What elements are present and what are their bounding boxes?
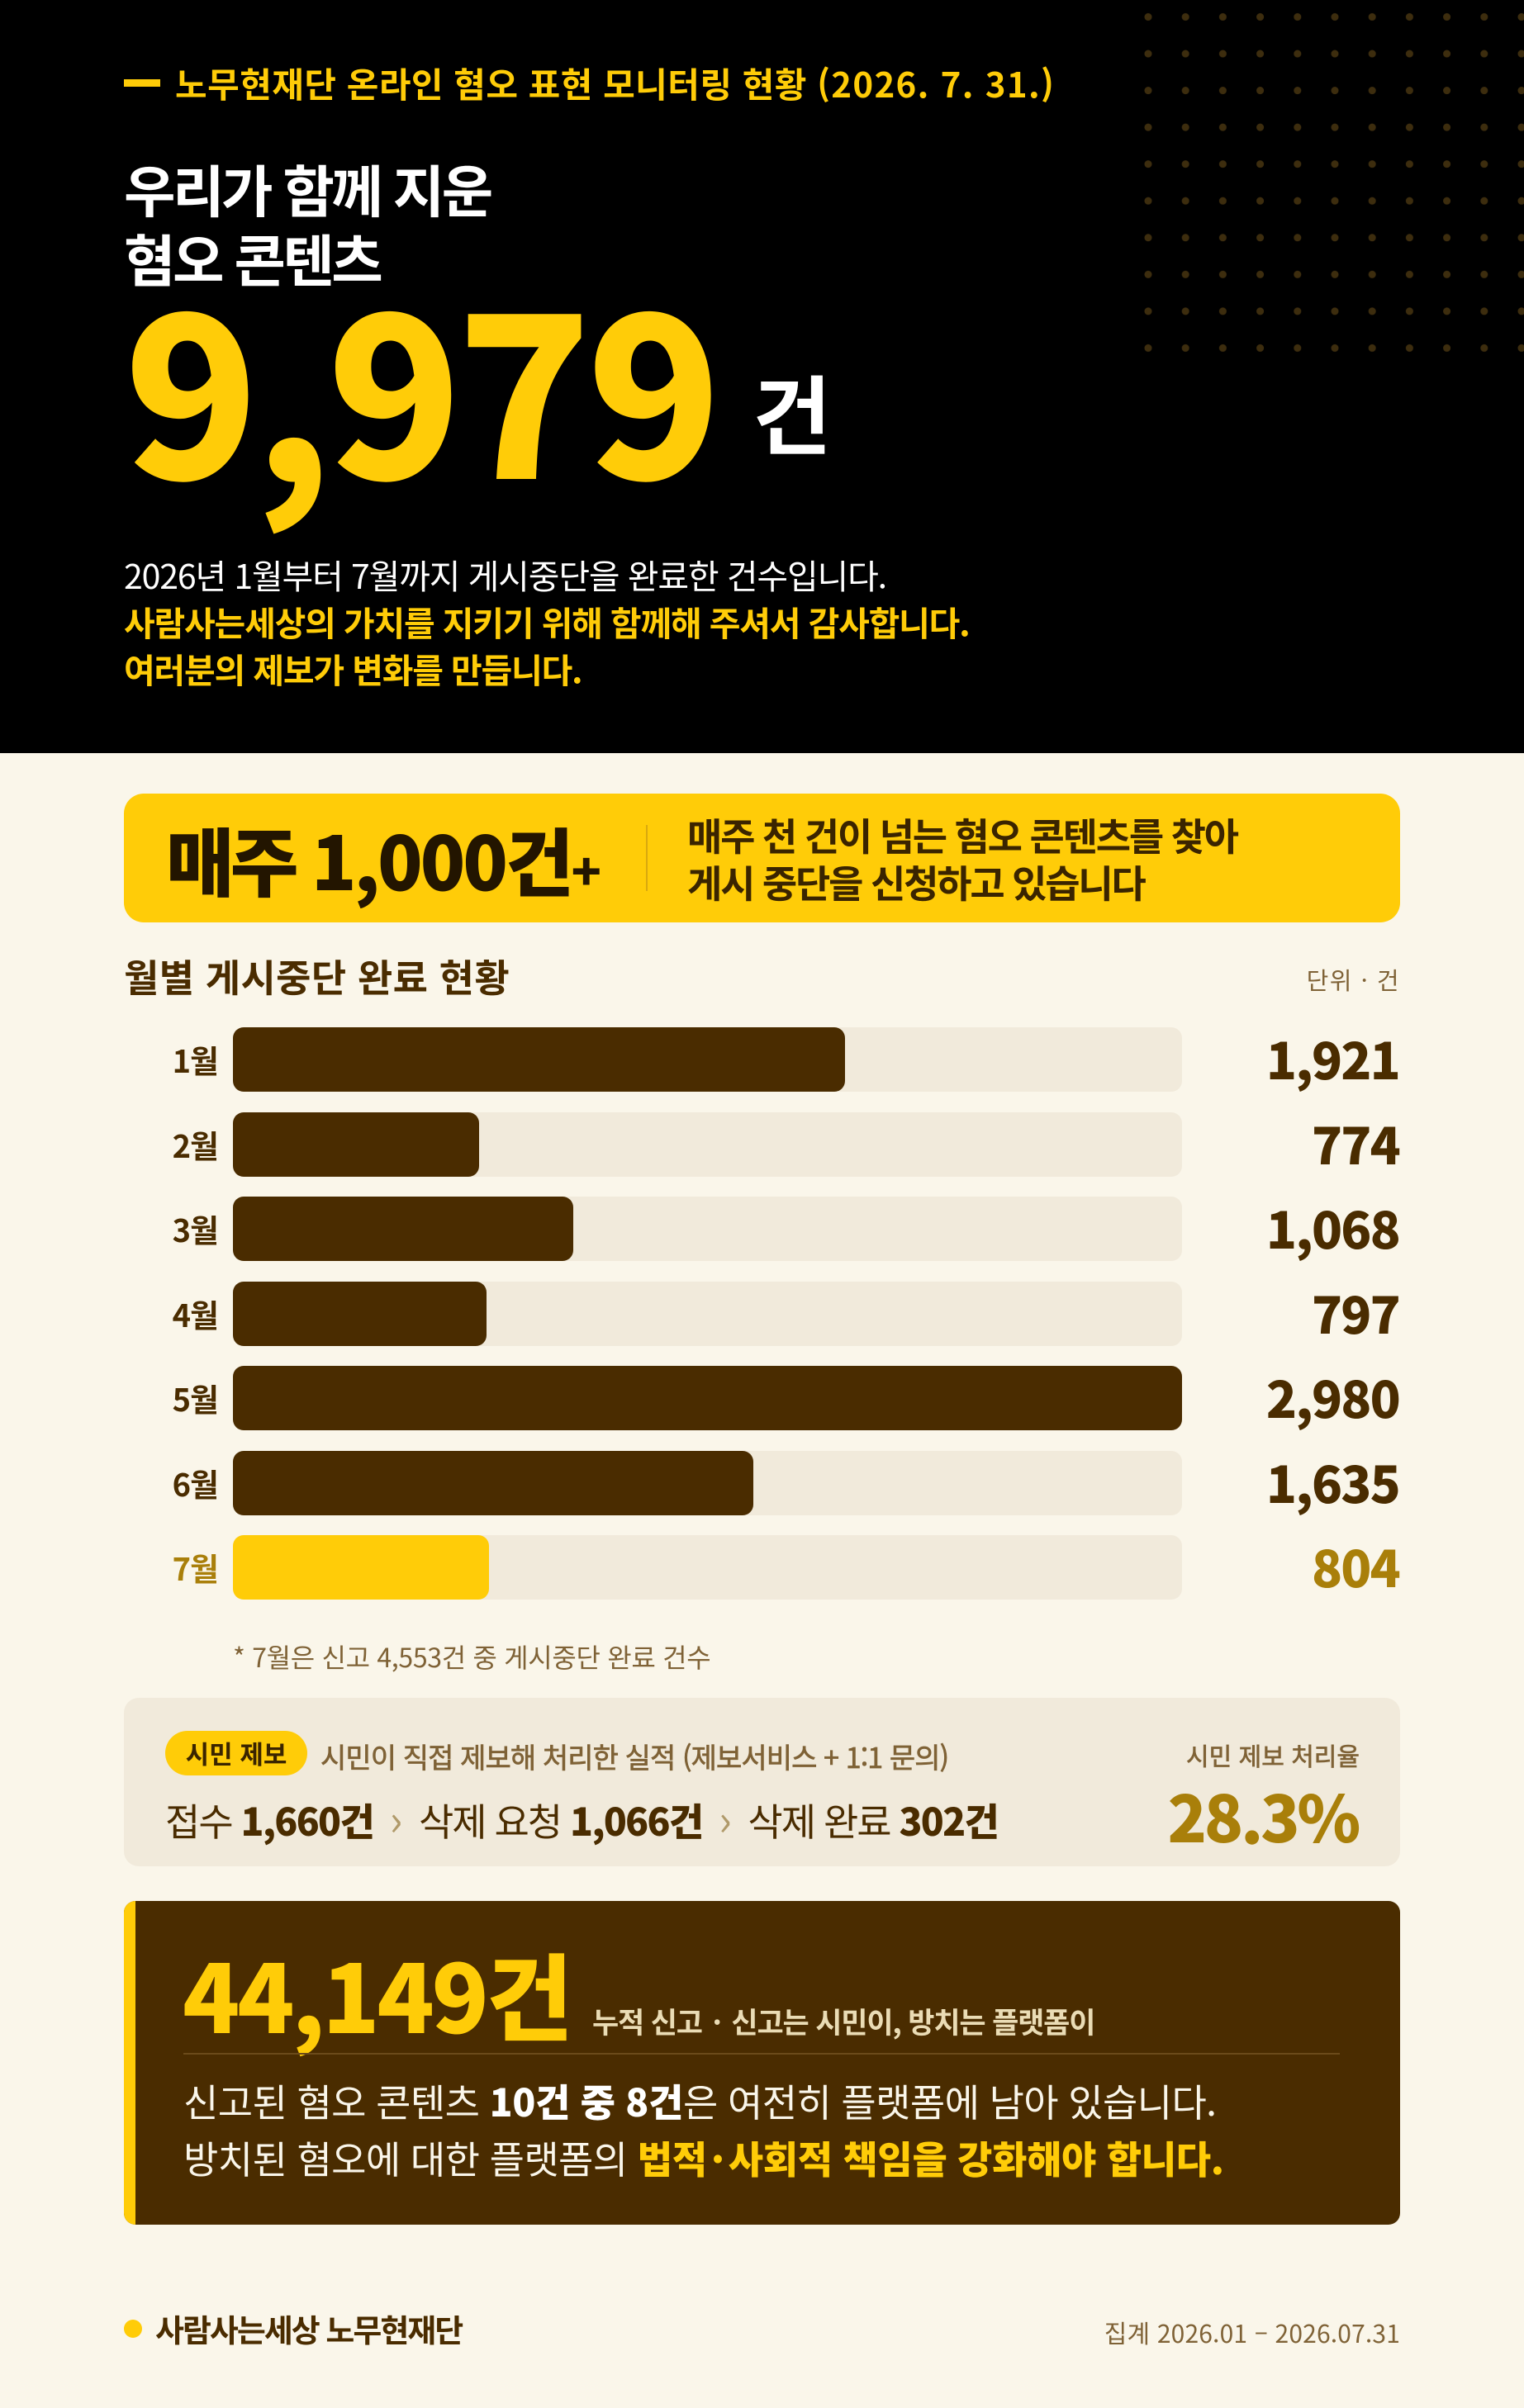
row: March: 1,068: [1266, 1189, 1399, 1263]
reporting flow: 접수 1,660건 삭제 요청 1,066건 삭제 완료 302건: [165, 1793, 998, 1847]
organization name: 사람사는세상 노무현재단: [155, 2306, 462, 2351]
row: April: [173, 1275, 1399, 1348]
banner description: [687, 808, 1239, 908]
chart footnote: * 7월은 신고 4,553건 중 게시중단 완료 건수: [233, 1638, 710, 1676]
panel: header: [0, 0, 1524, 753]
chart unit: 단위 · 건: [1307, 962, 1400, 997]
icon: yellow dash: [124, 79, 160, 87]
row: March: 3월: [173, 1206, 218, 1251]
row: June: 1,635: [1266, 1443, 1399, 1518]
banner headline: 매주 1,000건+: [166, 804, 599, 912]
cumulative number: 44,149건: [183, 1924, 570, 2060]
period: 집계 2026.01 – 2026.07.31: [1104, 2314, 1400, 2350]
row: February: [173, 1105, 1399, 1179]
row: March: [173, 1189, 1399, 1263]
reporting flow: ›: [719, 1786, 732, 1848]
conclusion text: 방치된 혐오에 대한 플랫폼의 법적·사회적 책임을 강화해야 합니다.: [183, 2131, 1224, 2185]
conclusion text: 신고된 혐오 콘텐츠 10건 중 8건은 여전히 플랫폼에 남아 있습니다.: [183, 2074, 1216, 2128]
title: 혐오 콘텐츠: [124, 216, 380, 298]
eyebrow heading: 노무현재단 온라인 혐오 표현 모니터링 현황 (2026. 7. 31.): [175, 58, 1055, 108]
pill badge: [165, 1731, 307, 1775]
title: [124, 147, 491, 298]
row: January: 1,921: [1266, 1021, 1399, 1093]
chart heading: 월별 게시중단 완료 현황: [124, 949, 510, 1003]
pill badge: 시민 제보: [186, 1734, 287, 1771]
banner description: 매주 천 건이 넘는 혐오 콘텐츠를 찾아: [687, 808, 1237, 862]
row: April: 797: [1312, 1275, 1399, 1348]
row: April: 4월: [173, 1291, 218, 1336]
cumulative caption: 누적 신고 · 신고는 시민이, 방치는 플랫폼이: [592, 2000, 1094, 2042]
reporting flow: ›: [390, 1786, 402, 1848]
footer: [124, 2306, 1400, 2351]
description: 여러분의 제보가 변화를 만듭니다.: [124, 643, 582, 693]
row: February: 774: [1312, 1105, 1399, 1179]
row: January: [173, 1021, 1399, 1093]
panel: cumulative reports: [124, 1901, 1400, 2225]
row: July: [173, 1528, 1399, 1602]
rate label: 시민 제보 처리율: [1186, 1737, 1360, 1773]
description: 사람사는세상의 가치를 지키기 위해 함께해 주셔서 감사합니다.: [124, 596, 969, 646]
banner description: 게시 중단을 신청하고 있습니다: [687, 854, 1145, 908]
yellow accent bar: [124, 1901, 135, 2225]
row: June: [173, 1443, 1399, 1518]
divider: [183, 2053, 1340, 2055]
citizen description: 시민이 직접 제보해 처리한 실적 (제보서비스 + 1:1 문의): [320, 1736, 948, 1776]
row: June: 6월: [173, 1460, 218, 1505]
banner divider: [646, 825, 648, 891]
row: February: 2월: [173, 1121, 218, 1167]
big number: 9,979: [124, 223, 716, 543]
row: May: 2,980: [1266, 1359, 1399, 1432]
bar chart: [124, 1027, 1400, 1600]
unit: 건: [753, 348, 832, 472]
row: May: 5월: [173, 1375, 218, 1420]
dot pattern decoration: [1145, 13, 1524, 352]
row: January: 1월: [173, 1036, 218, 1082]
conclusion text: [183, 2074, 1224, 2185]
row: July: 804: [1312, 1528, 1399, 1602]
row: May: [173, 1359, 1399, 1432]
rate value: 28.3%: [1168, 1769, 1358, 1861]
title: 우리가 함께 지운: [124, 147, 491, 229]
panel: weekly banner: [124, 794, 1400, 922]
panel: citizen reports: [124, 1698, 1400, 1866]
icon: footer dot: [124, 2320, 142, 2338]
description: [124, 549, 969, 693]
description: 2026년 1월부터 7월까지 게시중단을 완료한 건수입니다.: [124, 549, 886, 599]
row: July: 7월: [173, 1544, 218, 1590]
